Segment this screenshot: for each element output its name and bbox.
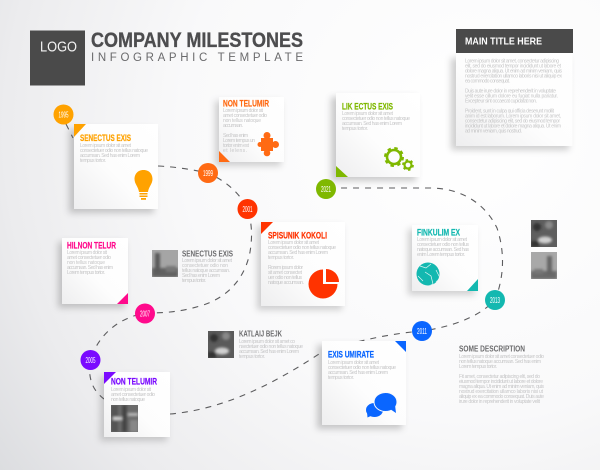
- panel: main title: nostrud exercitation ullamco laboris nisi ut aliquip ex: [465, 74, 562, 80]
- panel: spisunik kokoli: consectetuer odio non tellus natoque: [268, 245, 336, 251]
- panel: non telumir purple: NON TELUMIR: [111, 376, 157, 386]
- text block: katlaij bejk: nsectetuer odio non tellus natoque: [239, 344, 303, 350]
- title: COMPANY MILESTONES: [91, 29, 303, 52]
- panel: finkulim ex: enim Lorem tempus tortor.: [417, 252, 465, 258]
- text block: katlaij bejk: tempus tortor.: [239, 354, 265, 360]
- panel: non telumir orange: Lorem ipsum dolor sit: [223, 108, 264, 114]
- panel: lik ectus exis: tempus tortor.: [342, 126, 368, 132]
- text block: some description: eiusmod tempor incididunt ut labore et dolore: [459, 379, 543, 385]
- panel: lik ectus exis: consectetuer odio non tellus natoque: [342, 116, 410, 122]
- panel: non telumir orange: amet consectetuer odio: [223, 113, 267, 119]
- marker: 2005: 2005: [86, 356, 96, 365]
- panel: non telumir orange: Sed has enim: [223, 133, 248, 139]
- panel: main title: elit, sed do eiusmod tempor incididunt ut labore et: [465, 64, 562, 70]
- icon: speech bubbles: [366, 392, 397, 418]
- marker: 2011: [412, 321, 432, 341]
- panel: finkulim ex: Lorem ipsum dolor sit amet: [417, 237, 468, 243]
- panel: spisunik kokoli: tempus tortor.: [268, 255, 294, 261]
- marker: 2007: 2007: [140, 310, 150, 318]
- panel: spisunik kokoli: accumsan. Sed has enim Lorem: [268, 250, 328, 256]
- panel: non telumir orange: tortor enim est: [223, 143, 250, 149]
- panel: lik ectus exis: Lorem ipsum dolor sit amet: [342, 111, 394, 117]
- panel: main title: consectetur adipiscing elit, sed do eiusmod tempor: [465, 118, 560, 124]
- icon: puzzle: [258, 132, 279, 156]
- panel: non telumir purple: [100, 372, 170, 441]
- panel: spisunik kokoli: uer odio non tellus: [268, 275, 302, 281]
- panel: hilnon telur: accumsan. Sed has enim: [67, 265, 113, 271]
- panel: exis umirate: [317, 341, 406, 429]
- marker: 1999: [198, 163, 218, 183]
- image: flower thumbnail: [208, 331, 234, 358]
- text block: senectus exis: SENECTUS EXIS: [182, 250, 234, 258]
- panel: spisunik kokoli: Rorem ipsum dolor: [268, 265, 303, 271]
- icon: light bulb: [134, 170, 152, 200]
- text block: some description: nostrud exercitation ullamco laboris nisi ut: [459, 389, 544, 395]
- panel: spisunik kokoli: Lorem ipsum dolor sit amet: [268, 240, 320, 246]
- panel: lik ectus exis: accumsan. Sed has enim Lorem: [342, 121, 402, 127]
- panel: main title: ea commodo consequat.: [465, 78, 510, 84]
- panel: main title: ad minim veniam, quis nostrud.: [465, 128, 522, 134]
- panel: main title: Proident, sunt in culpa qui officia deserunt mollit: [465, 108, 555, 114]
- text block: some description: aliquip ex ea commodo consequat. Duis aute: [459, 394, 544, 400]
- panel: main title: Excepteur sint occaecat cupidatat non.: [465, 98, 537, 104]
- icon: gears: [385, 148, 413, 170]
- panel: non telumir orange: et lelens.: [223, 148, 247, 154]
- panel: finkulim ex: consectetuer odio non tellus: [417, 242, 470, 248]
- panel: main title: incididunt ut labore et dolore magna aliqua. Ut enim: [465, 124, 561, 130]
- text block: senectus exis: [152, 250, 234, 284]
- marker: 2005: [80, 350, 100, 370]
- marker: 2001: 2001: [242, 205, 253, 214]
- panel: exis umirate: tempus tortor.: [328, 375, 354, 381]
- panel: lik ectus exis: [331, 93, 420, 181]
- panel: senectus exis: SENECTUS EXIS: [80, 133, 131, 143]
- panel: lik ectus exis: LIK ECTUS EXIS: [342, 102, 393, 112]
- panel: spisunik kokoli: sit amet consectet: [268, 270, 303, 276]
- image: city thumbnail right: [531, 252, 557, 279]
- text block: senectus exis: tempus tortor.: [182, 278, 206, 284]
- panel: main title: MAIN TITLE HERE: [465, 36, 542, 48]
- panel: exis umirate: EXIS UMIRATE: [328, 350, 374, 360]
- text block: senectus exis: consectetuer odio non: [182, 263, 228, 269]
- panel: non telumir purple: amet consectetuer odio: [111, 392, 155, 398]
- text block: some description: Lorem tempus tortor.: [459, 364, 497, 370]
- title: INFOGRAPHIC TEMPLATE: [91, 52, 303, 64]
- panel: exis umirate: consectetuer odio non tellus natoque: [328, 365, 396, 371]
- panel: hilnon telur: amet consectetuer odio: [67, 255, 111, 261]
- panel: hilnon telur: Lorem ipsum dolor sit: [67, 250, 108, 256]
- icon: pie chart: [308, 269, 339, 298]
- marker: 2013: 2013: [490, 296, 500, 305]
- panel: senectus exis: Lorem ipsum dolor sit amet: [80, 143, 132, 149]
- marker: 2007: [135, 304, 155, 324]
- text block: katlaij bejk: KATLAIJ BEJK: [239, 330, 282, 338]
- text block: some description: Fit amet, consectetur adipiscing elit, sed do: [459, 374, 540, 380]
- text block: some description: [459, 344, 544, 405]
- marker: 2001: [238, 199, 258, 219]
- text block: some description: SOME DESCRIPTION: [459, 344, 525, 354]
- logo: [30, 30, 85, 86]
- panel: main title: Lorem ipsum dolor sit amet, consectetur adipiscing: [465, 58, 559, 64]
- marker: 2021: [316, 179, 336, 199]
- panel: non telumir orange: [215, 97, 284, 166]
- image: city thumbnail: [152, 250, 178, 277]
- panel: non telumir orange: Lorem tempus un: [223, 138, 255, 144]
- panel: senectus exis: consectetuer odio non tellus natoque: [80, 148, 148, 154]
- marker: 1995: [54, 104, 74, 124]
- text block: some description: irure dolor in reprehenderit in voluptate velit: [459, 399, 541, 405]
- panel: senectus exis: tempus tortor.: [80, 158, 106, 164]
- image: flower thumbnail right: [531, 220, 557, 247]
- logo: LOGO: [40, 38, 77, 56]
- text block: katlaij bejk: accumsan. Sed has enim Lorem: [239, 349, 299, 355]
- text block: katlaij bejk: [208, 330, 303, 360]
- panel: senectus exis: accumsan. Sed has enim Lorem: [80, 153, 140, 159]
- panel: exis umirate: Lorem ipsum dolor sit amet: [328, 360, 380, 366]
- panel: hilnon telur: HILNON TELUR: [67, 240, 116, 250]
- text block: some description: non tellus natoque accumsan. Sed has enim: [459, 359, 541, 365]
- panel: exis umirate: accumsan. Sed has enim Lorem: [328, 370, 388, 376]
- text block: senectus exis: Sed has enim Lorem: [182, 273, 220, 279]
- timeline path: [66, 124, 503, 414]
- icon: globe: [416, 262, 440, 286]
- text block: katlaij bejk: Lorem ipsum dolor sit amet co: [239, 339, 295, 345]
- image: building thumbnail: [111, 405, 138, 432]
- marker: 1995: 1995: [58, 110, 69, 120]
- panel: main title: dolore magna aliqua. Ut enim ad minim veniam, quis: [465, 68, 562, 74]
- title: [91, 29, 303, 64]
- panel: main title: Duis aute irure dolor in reprehenderit in voluptate: [465, 88, 556, 94]
- text block: some description: Lorem ipsum dolor sit amet consectetuer odio: [459, 354, 544, 360]
- panel: non telumir orange: accumsan.: [223, 123, 243, 129]
- panel: main title: [451, 29, 573, 150]
- panel: spisunik kokoli: natoque accumsan.: [268, 280, 304, 286]
- panel: non telumir purple: non tellus natoque: [111, 397, 145, 403]
- panel: spisunik kokoli: [257, 222, 345, 310]
- panel: hilnon telur: [58, 238, 128, 308]
- marker: 1999: 1999: [203, 169, 213, 178]
- panel: spisunik kokoli: SPISUNIK KOKOLI: [268, 230, 327, 240]
- panel: non telumir purple: Lorem ipsum dolor sit: [111, 387, 152, 393]
- panel: hilnon telur: Lorem tempus tortor.: [67, 270, 105, 276]
- marker: 2021: 2021: [321, 185, 331, 194]
- panel: main title: velit esse cillum dolore eu fugiat nulla pariatur.: [465, 94, 558, 100]
- panel: hilnon telur: non tellus natoque: [67, 260, 105, 266]
- panel: non telumir orange: NON TELUMIR: [223, 98, 269, 108]
- panel: senectus exis: [69, 124, 158, 213]
- panel: finkulim ex: natoque accumsan. Sed has: [417, 247, 470, 253]
- text block: senectus exis: tellus natoque accumsan.: [182, 268, 230, 274]
- panel: main title: anim id est laborum. Lorem ipsum dolor sit amet,: [465, 114, 561, 120]
- marker: 2013: [485, 290, 505, 310]
- panel: non telumir orange: non tellus natoque: [223, 118, 261, 124]
- marker: 2011: 2011: [417, 327, 427, 336]
- panel: finkulim ex: [408, 225, 478, 295]
- text block: some description: magna aliqua. Ut enim ad minim veniam, quis: [459, 384, 544, 390]
- panel: finkulim ex: FINKULIM EX: [417, 228, 460, 238]
- text block: senectus exis: Lorem ipsum dolor sit amet: [182, 258, 233, 264]
